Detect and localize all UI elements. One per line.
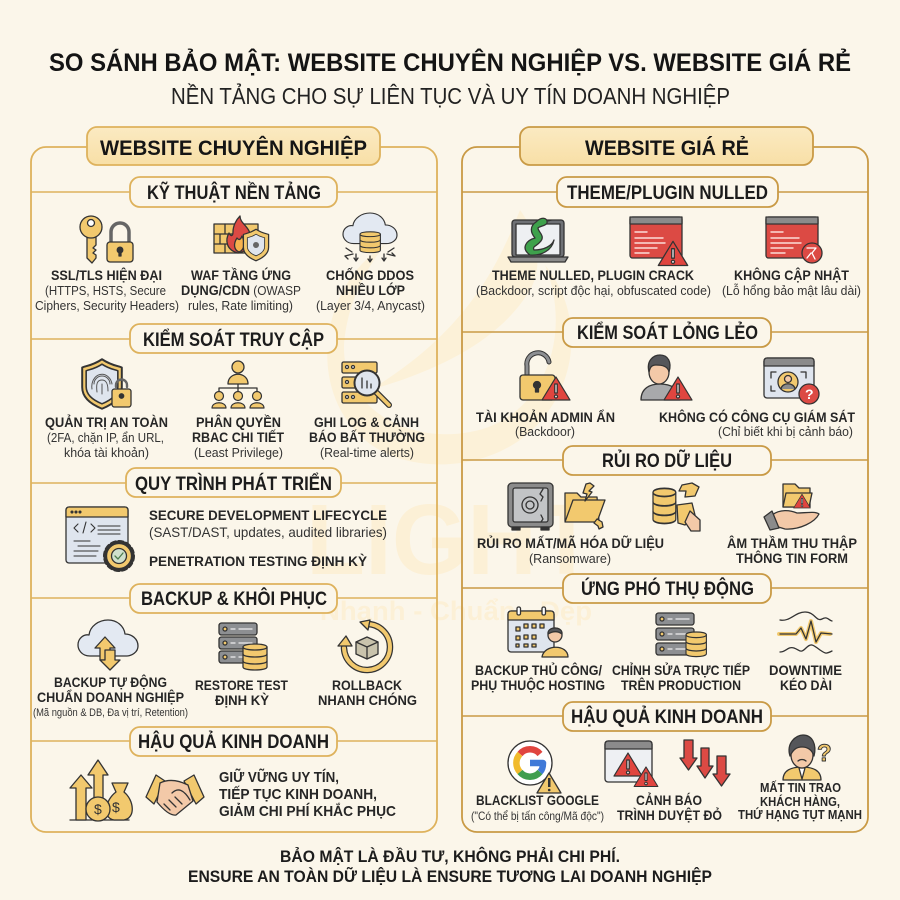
icon: downtime waves [779, 612, 832, 653]
text: ghi log: GHI LOG & CẢNH [314, 415, 419, 430]
icon: worried person: ? [817, 740, 832, 767]
section heading: backup và khôi phục [130, 584, 337, 613]
text: phân quyền: RBAC CHI TIẾT [192, 430, 285, 445]
text: ghi log [309, 415, 425, 460]
text: rủi ro mất mã hóa: (Ransomware) [529, 551, 611, 566]
section heading: rủi ro dữ liệu [563, 446, 771, 475]
panel: website giá rẻ [462, 127, 868, 832]
text: ghi log: BÁO BẤT THƯỜNG [309, 430, 425, 445]
watermark logo: LIGHT [306, 484, 596, 596]
text: backup tự động: (Mã nguồn & DB, Đa vị trí, Retention) [33, 707, 188, 719]
text: cảnh báo trình duyệt đỏ: TRÌNH DUYỆT ĐỎ [617, 808, 722, 823]
icon: production server [656, 613, 706, 657]
text: giữ vững uy tín: GIẢM CHI PHÍ KHẮC PHỤC [219, 802, 396, 820]
text: không cập nhật: KHÔNG CẬP NHẬT [734, 268, 850, 283]
text: restore test [195, 678, 289, 708]
text: tài khoản admin ẩn: (Backdoor) [515, 424, 575, 439]
section heading: kiểm soát truy cập: KIỂM SOÁT TRUY CẬP [143, 329, 324, 351]
section heading: backup và khôi phục: BACKUP & KHÔI PHỤC [141, 588, 327, 610]
section heading: hậu quả kinh doanh [130, 727, 337, 756]
icon: key and lock [80, 216, 133, 263]
text: chỉnh sửa trực tiếp: CHỈNH SỬA TRỰC TIẾP [612, 663, 750, 678]
text: restore test: RESTORE TEST [195, 678, 289, 693]
icon: monitoring window [764, 358, 819, 404]
icon: rollback [338, 620, 390, 670]
text: downtime: DOWNTIME [769, 663, 842, 678]
icon: database puzzle [653, 483, 700, 531]
text: giữ vững uy tín: GIỮ VỮNG UY TÍN, [219, 768, 339, 786]
text: âm thầm thu thập: ÂM THẦM THU THẬP [727, 536, 857, 551]
text: mất tin trao: KHÁCH HÀNG, [760, 794, 840, 809]
text: backup thủ công: PHỤ THUỘC HOSTING [471, 678, 605, 693]
text: âm thầm thu thập: THÔNG TIN FORM [736, 551, 848, 566]
text: quản trị an toàn: QUẢN TRỊ AN TOÀN [45, 415, 168, 430]
text: theme nulled [476, 268, 711, 298]
footer message [188, 847, 712, 886]
text: không có công cụ giám sát [659, 410, 856, 439]
text: quản trị an toàn: (2FA, chặn IP, ẩn URL, [47, 430, 164, 445]
text: backup thủ công: BACKUP THỦ CÔNG/ [475, 663, 602, 678]
title: SO SÁNH BẢO MẬT: WEBSITE CHUYÊN NGHIỆP VS. WEBSITE GIÁ RẺ [49, 47, 851, 77]
text: SSL/TLS [35, 268, 179, 313]
icon: code window with gear [66, 507, 133, 570]
icon: cloud backup [78, 620, 138, 670]
text: chống ddos: (Layer 3/4, Anycast) [316, 298, 425, 313]
section heading: kỹ thuật nền tảng: KỸ THUẬT NỀN TẢNG [147, 182, 321, 204]
text: chống ddos: NHIỀU LỚP [336, 283, 405, 298]
text: quản trị an toàn: khóa tài khoản) [64, 445, 149, 460]
icon: broken safe [508, 483, 553, 530]
text: WAF: rules, Rate limiting) [188, 298, 293, 313]
text: backup thủ công [471, 663, 605, 693]
section heading: ứng phó thụ động: ỨNG PHÓ THỤ ĐỘNG [581, 578, 754, 600]
text: blacklist google: BLACKLIST GOOGLE [476, 793, 599, 808]
text: secure development: (SAST/DAST, updates, audited libraries) [149, 524, 387, 540]
text: blacklist google: ("Có thể bị tấn công/Mã độc") [471, 809, 604, 823]
text: không có công cụ giám sát: KHÔNG CÓ CÔNG CỤ GIÁM SÁT [659, 410, 856, 425]
text: rollback: ROLLBACK [332, 678, 402, 693]
section heading: theme plugin nulled: THEME/PLUGIN NULLED [567, 183, 768, 204]
text: backup tự động [33, 675, 188, 719]
text: WAF: DỤNG/CDN (OWASP [181, 282, 301, 298]
icon: open lock warning [520, 353, 570, 400]
icon: firewall [214, 216, 269, 261]
text: không cập nhật: (Lỗ hổng bảo mật lâu dài) [722, 283, 861, 298]
icon: growth arrows and money [70, 760, 132, 821]
icon: google warning [508, 741, 561, 793]
text: chống ddos [316, 268, 425, 313]
icon: folder in hand [764, 484, 819, 530]
text: tài khoản admin ẩn: TÀI KHOẢN ADMIN ẨN [476, 410, 615, 425]
icon: monitoring window: ? [805, 386, 814, 402]
icon: org chart [212, 361, 264, 408]
text: theme nulled: THEME NULLED, PLUGIN CRACK [492, 268, 694, 283]
text: giữ vững uy tín [219, 768, 396, 820]
text: blacklist google [471, 793, 604, 823]
text: âm thầm thu thập [727, 536, 857, 566]
icon: shield fingerprint [82, 359, 131, 409]
text: backup tự động: BACKUP TỰ ĐỘNG [54, 675, 167, 690]
text: giữ vững uy tín: TIẾP TỤC KINH DOANH, [219, 786, 377, 803]
text: phân quyền: (Least Privilege) [194, 445, 283, 460]
icon: growth arrows and money: $ [94, 801, 102, 817]
icon: user warning [641, 355, 692, 400]
text: phân quyền [192, 415, 285, 460]
footer message: BẢO MẬT LÀ ĐẦU TƯ, KHÔNG PHẢI CHI PHÍ. [280, 847, 620, 866]
text: SSL/TLS: Ciphers, Security Headers) [35, 298, 179, 313]
text: quản trị an toàn [45, 415, 168, 460]
text: WAF: WAF TẦNG ỨNG [191, 268, 291, 283]
text: secure development [149, 508, 387, 569]
text: downtime: KÉO DÀI [780, 678, 832, 693]
text: rủi ro mất mã hóa: RỦI RO MẤT/MÃ HÓA DỮ LIỆU [477, 536, 664, 551]
panel header: WEBSITE GIÁ RẺ [585, 135, 749, 160]
text: restore test: ĐỊNH KỲ [215, 693, 269, 708]
text: mất tin trao [738, 780, 862, 822]
text: secure development: SECURE DEVELOPMENT LIFECYCLE [149, 508, 387, 523]
section heading: hậu quả kinh doanh: HẬU QUẢ KINH DOANH [571, 706, 763, 728]
text: backup tự động: CHUẨN DOANH NGHIỆP [37, 690, 184, 705]
text: rollback [318, 678, 417, 708]
icon: growth arrows and money: $ [112, 799, 120, 815]
icon: handshake [146, 775, 204, 815]
text: chỉnh sửa trực tiếp: TRÊN PRODUCTION [621, 678, 741, 693]
text: SSL/TLS: SSL/TLS HIỆN ĐẠI [51, 268, 162, 283]
text: chống ddos: CHỐNG DDOS [326, 268, 414, 283]
panel header [87, 127, 380, 165]
text: mất tin trao: THỨ HẠNG TỤT MẠNH [738, 807, 862, 822]
panel header: WEBSITE CHUYÊN NGHIỆP [100, 135, 367, 160]
title: NỀN TẢNG CHO SỰ LIÊN TỤC VÀ UY TÍN DOANH NGHIỆP [171, 81, 730, 109]
icon: server and database [219, 623, 267, 670]
section heading: kiểm soát lỏng lẻo: KIỂM SOÁT LỎNG LẺO [577, 322, 758, 344]
text: rủi ro mất mã hóa [477, 536, 664, 566]
icon: laptop with snake [508, 218, 568, 262]
text: mất tin trao: MẤT TIN TRAO [760, 780, 841, 795]
section heading: kỹ thuật nền tảng [130, 177, 337, 207]
text: rollback: NHANH CHÓNG [318, 693, 417, 708]
text: phân quyền: PHÂN QUYỀN [196, 415, 281, 430]
title [49, 47, 851, 109]
section heading: quy trình phát triển [126, 468, 341, 497]
section heading: hậu quả kinh doanh [563, 702, 771, 731]
section heading: theme plugin nulled [557, 177, 778, 207]
icon: falling red arrows [680, 740, 730, 786]
text: secure development: PENETRATION TESTING ĐỊNH KỲ [149, 554, 367, 569]
icon: worried person [783, 735, 832, 780]
icon: red code window with warning [630, 217, 688, 266]
text: cảnh báo trình duyệt đỏ [617, 793, 722, 823]
section heading: hậu quả kinh doanh: HẬU QUẢ KINH DOANH [138, 731, 329, 753]
watermark logo [306, 210, 596, 626]
text: ghi log: (Real-time alerts) [320, 445, 414, 460]
panel: website chuyên nghiệp [31, 127, 437, 832]
text: không cập nhật [722, 268, 861, 298]
section heading: rủi ro dữ liệu: RỦI RO DỮ LIỆU [602, 450, 732, 472]
section heading: kiểm soát lỏng lẻo [563, 318, 771, 347]
text: downtime [769, 663, 842, 693]
text: WAF [181, 268, 301, 313]
section heading: ứng phó thụ động [563, 574, 771, 603]
text: chỉnh sửa trực tiếp [612, 663, 750, 693]
icon: log magnifier [342, 362, 389, 405]
text: cảnh báo trình duyệt đỏ: CẢNH BÁO [636, 793, 702, 808]
text: SSL/TLS: (HTTPS, HSTS, Secure [45, 283, 166, 298]
text: theme nulled: (Backdoor, script độc hại, obfuscated code) [476, 283, 711, 298]
icon: cloud ddos [343, 213, 397, 262]
text: không có công cụ giám sát: (Chỉ biết khi bị cảnh báo) [718, 424, 853, 439]
section heading: quy trình phát triển: QUY TRÌNH PHÁT TRIỂN [135, 473, 332, 495]
watermark logo: Nhanh - Chuẩn - Đẹp [320, 596, 592, 626]
icon: outdated red window [766, 217, 822, 263]
icon: browser warnings [605, 741, 658, 786]
panel header [520, 127, 813, 165]
icon: broken folder [565, 483, 605, 529]
footer message: ENSURE AN TOÀN DỮ LIỆU LÀ ENSURE TƯƠNG LAI DOANH NGHIỆP [188, 866, 712, 886]
text: tài khoản admin ẩn [476, 410, 615, 439]
icon: calendar and user [508, 607, 568, 657]
section heading: kiểm soát truy cập [130, 324, 337, 353]
